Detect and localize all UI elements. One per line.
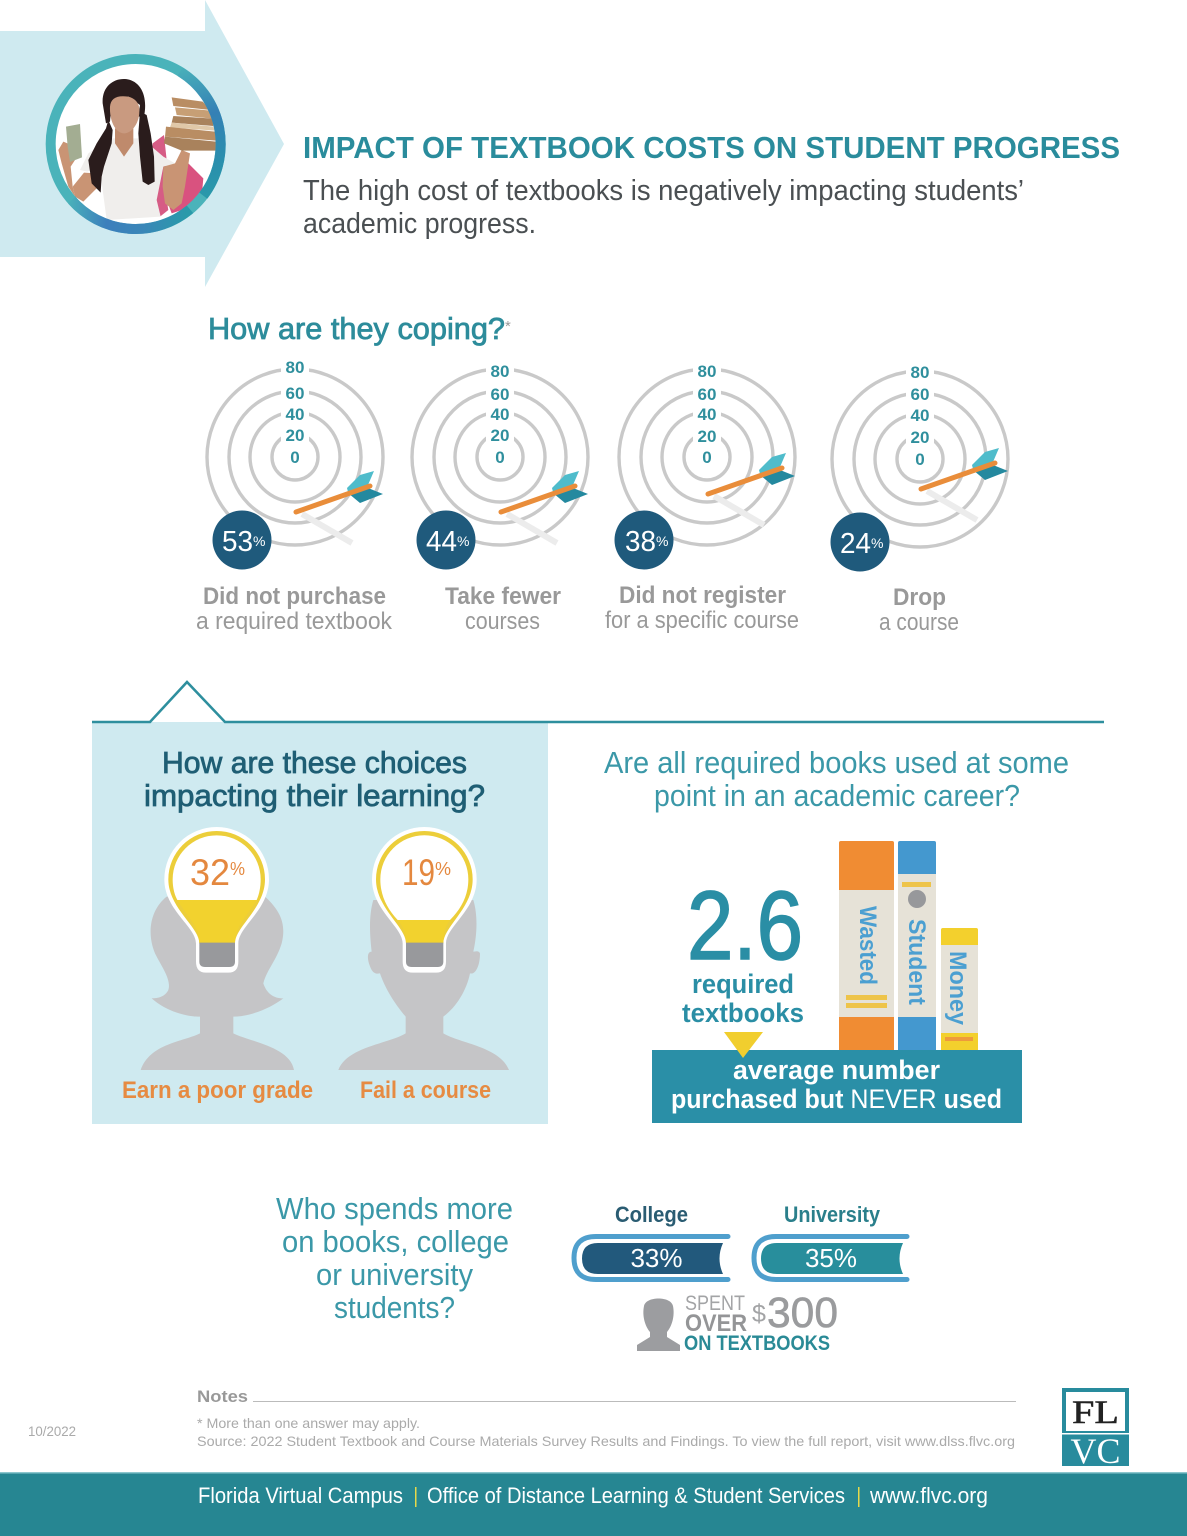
chart: target 44 percent take fewer courses bbox=[412, 362, 588, 635]
badge: 53%: 53 bbox=[222, 526, 253, 558]
chart: target 38 percent did not register bbox=[605, 362, 799, 634]
footer band: Office of Distance Learning & Student Services bbox=[427, 1483, 845, 1508]
logo: FLVC: VC bbox=[1070, 1431, 1120, 1471]
chart: target 44 percent take fewer courses: 40 bbox=[491, 405, 509, 424]
notes text bbox=[197, 1415, 1015, 1449]
chart: target 53 percent did not purchase: 80 bbox=[286, 358, 304, 377]
label: take fewer courses bbox=[445, 583, 561, 635]
heading: who spends more: on books, college bbox=[282, 1224, 509, 1259]
panel: impact on learning bbox=[92, 722, 548, 1124]
title: IMPACT OF TEXTBOOK COSTS ON STUDENT PROGRESS bbox=[303, 130, 1120, 165]
notes text: * More than one answer may apply. bbox=[197, 1415, 420, 1431]
label: take fewer courses: courses bbox=[465, 608, 540, 635]
chart: target 38 percent did not register: 0 bbox=[702, 448, 712, 467]
heading: are all required books used: point in an academic career? bbox=[654, 778, 1020, 813]
badge: 53%: % bbox=[253, 533, 265, 549]
banner: average number purchased but never used: average number bbox=[733, 1055, 940, 1085]
label: did not register bbox=[605, 582, 799, 634]
badge: 44%: % bbox=[457, 533, 469, 549]
logo: FLVC: FL bbox=[1072, 1395, 1119, 1431]
arrow: dart bbox=[501, 471, 588, 543]
icon: person silhouette bbox=[637, 1298, 680, 1351]
chart: target 53 percent did not purchase: 40 bbox=[286, 405, 304, 424]
stat: 2.6 required textbooks bbox=[682, 871, 804, 1028]
heading: how are these choices bbox=[144, 745, 485, 813]
heading: how are these choices: impacting their learning? bbox=[144, 778, 485, 813]
callout: spent over $300 on textbooks: ON TEXTBOOKS bbox=[684, 1332, 830, 1355]
icon: female head with 32 percent bulb bbox=[141, 827, 294, 1070]
footer band: www.flvc.org bbox=[869, 1483, 988, 1508]
icon: book student: Student bbox=[903, 919, 930, 1005]
label: take fewer courses: Take fewer bbox=[445, 583, 561, 610]
stat: 2.6 required textbooks: 2.6 bbox=[687, 871, 803, 980]
label: college: College bbox=[615, 1202, 688, 1227]
badge: 38%: % bbox=[656, 533, 668, 549]
photo: student holding money and textbooks bbox=[51, 59, 221, 229]
label: fail a course: Fail a course bbox=[360, 1077, 491, 1104]
callout: spent over $300 on textbooks: OVER bbox=[685, 1310, 747, 1337]
badge: 38% bbox=[614, 510, 674, 570]
heading: who spends more: or university bbox=[316, 1257, 473, 1292]
label: drop a course: a course bbox=[879, 609, 959, 636]
stat: 32%: 32 bbox=[190, 852, 230, 893]
chart: target 44 percent take fewer courses: 60 bbox=[491, 385, 509, 404]
heading: are all required books used bbox=[604, 745, 1069, 813]
label: drop a course bbox=[879, 584, 959, 636]
chart: target 53 percent did not purchase: 60 bbox=[286, 384, 304, 403]
stat: 19%: 19 bbox=[402, 852, 435, 893]
badge: 24% bbox=[830, 512, 890, 572]
chart: target 53 percent did not purchase bbox=[196, 358, 393, 635]
subtitle: academic progress. bbox=[303, 208, 536, 240]
arrow: dart bbox=[296, 471, 383, 543]
chart: target 24 percent drop a course: 80 bbox=[911, 363, 929, 382]
notes text: Source: 2022 Student Textbook and Course Materials Survey Results and Findings. To view the full report, visit www.dlss.flvc.org bbox=[197, 1433, 1015, 1449]
label: did not purchase: a required textbook bbox=[196, 608, 393, 635]
callout: spent over $300 on textbooks: $ bbox=[752, 1300, 766, 1328]
callout: spent over $300 on textbooks: 300 bbox=[767, 1289, 838, 1337]
logo: FLVC bbox=[1062, 1388, 1129, 1471]
bar: college book 33 percent: 33% bbox=[630, 1243, 683, 1273]
chart: target 24 percent drop a course: 0 bbox=[915, 450, 925, 469]
heading: who spends more: Who spends more bbox=[276, 1191, 513, 1226]
heading: how are they coping: * bbox=[505, 318, 511, 335]
heading: how are these choices: How are these choices bbox=[162, 745, 467, 780]
chart: target 44 percent take fewer courses: 20 bbox=[491, 426, 509, 445]
banner: average number purchased but never used: purchased but NEVER used bbox=[671, 1084, 1002, 1114]
icon: book student bbox=[898, 841, 936, 1050]
stat: 2.6 required textbooks: required bbox=[692, 969, 794, 999]
icon: male head with 19 percent bulb bbox=[338, 827, 509, 1070]
banner: average number purchased but never used bbox=[652, 1050, 1022, 1123]
chart: target 38 percent did not register: 80 bbox=[698, 362, 716, 381]
badge: 38%: 38 bbox=[625, 526, 656, 558]
label: did not purchase bbox=[196, 583, 393, 635]
label: university: University bbox=[784, 1202, 881, 1227]
chart: target 38 percent did not register: 40 bbox=[698, 405, 716, 424]
heading: who spends more: students? bbox=[334, 1290, 455, 1325]
icon: book wasted bbox=[839, 841, 894, 1050]
bar: college book 33 percent bbox=[574, 1236, 728, 1280]
icon: book money: Money bbox=[944, 951, 971, 1026]
subtitle bbox=[303, 175, 1024, 240]
label: did not register: Did not register bbox=[619, 582, 786, 609]
badge: 44%: 44 bbox=[426, 526, 457, 558]
section rule with peak bbox=[92, 682, 1104, 722]
chart: target 38 percent did not register: 60 bbox=[698, 385, 716, 404]
chart: target 53 percent did not purchase: 0 bbox=[290, 448, 300, 467]
arrow: yellow pointer bbox=[724, 1032, 763, 1058]
heading: how are they coping: How are they coping? bbox=[208, 311, 505, 346]
arrow: dart bbox=[708, 453, 795, 525]
heading: are all required books used: Are all required books used at some bbox=[604, 745, 1069, 780]
label: did not purchase: Did not purchase bbox=[203, 583, 386, 610]
stat: 32%: % bbox=[230, 859, 245, 879]
heading: who spends more bbox=[276, 1191, 513, 1325]
chart: target 38 percent did not register: 20 bbox=[698, 427, 716, 446]
stat: 2.6 required textbooks: textbooks bbox=[682, 998, 804, 1028]
chart: target 44 percent take fewer courses: 0 bbox=[495, 448, 505, 467]
badge: 44% bbox=[416, 510, 476, 570]
callout: spent over $300 on textbooks bbox=[684, 1289, 838, 1355]
bar: university book 35 percent: 35% bbox=[805, 1243, 857, 1273]
subtitle: The high cost of textbooks is negatively impacting students’ bbox=[303, 175, 1024, 207]
chart: target 24 percent drop a course: 60 bbox=[911, 385, 929, 404]
icon: book wasted: Wasted bbox=[854, 906, 881, 985]
footer band bbox=[0, 1472, 1187, 1536]
chart: target 44 percent take fewer courses: 80 bbox=[491, 362, 509, 381]
chart: target 24 percent drop a course: 20 bbox=[911, 428, 929, 447]
stat: 19%: % bbox=[435, 859, 451, 879]
badge: 53% bbox=[212, 510, 272, 570]
bar: university book 35 percent bbox=[754, 1236, 907, 1280]
chart: target 24 percent drop a course bbox=[830, 363, 1008, 636]
callout: spent over $300 on textbooks: SPENT bbox=[685, 1292, 745, 1315]
badge: 24%: % bbox=[871, 535, 883, 551]
label: did not register: for a specific course bbox=[605, 607, 799, 634]
date: 10/2022 bbox=[28, 1423, 76, 1439]
chart: target 24 percent drop a course: 40 bbox=[911, 406, 929, 425]
icon: book money bbox=[941, 928, 978, 1051]
notes heading: Notes bbox=[197, 1387, 248, 1406]
label: drop a course: Drop bbox=[893, 584, 946, 611]
arrow: dart bbox=[921, 448, 1008, 520]
badge: 24%: 24 bbox=[840, 528, 871, 560]
label: earn a poor grade: Earn a poor grade bbox=[122, 1077, 313, 1104]
chart: target 53 percent did not purchase: 20 bbox=[286, 426, 304, 445]
header arrow banner bbox=[0, 0, 284, 287]
footer band: Florida Virtual Campus bbox=[198, 1483, 403, 1508]
